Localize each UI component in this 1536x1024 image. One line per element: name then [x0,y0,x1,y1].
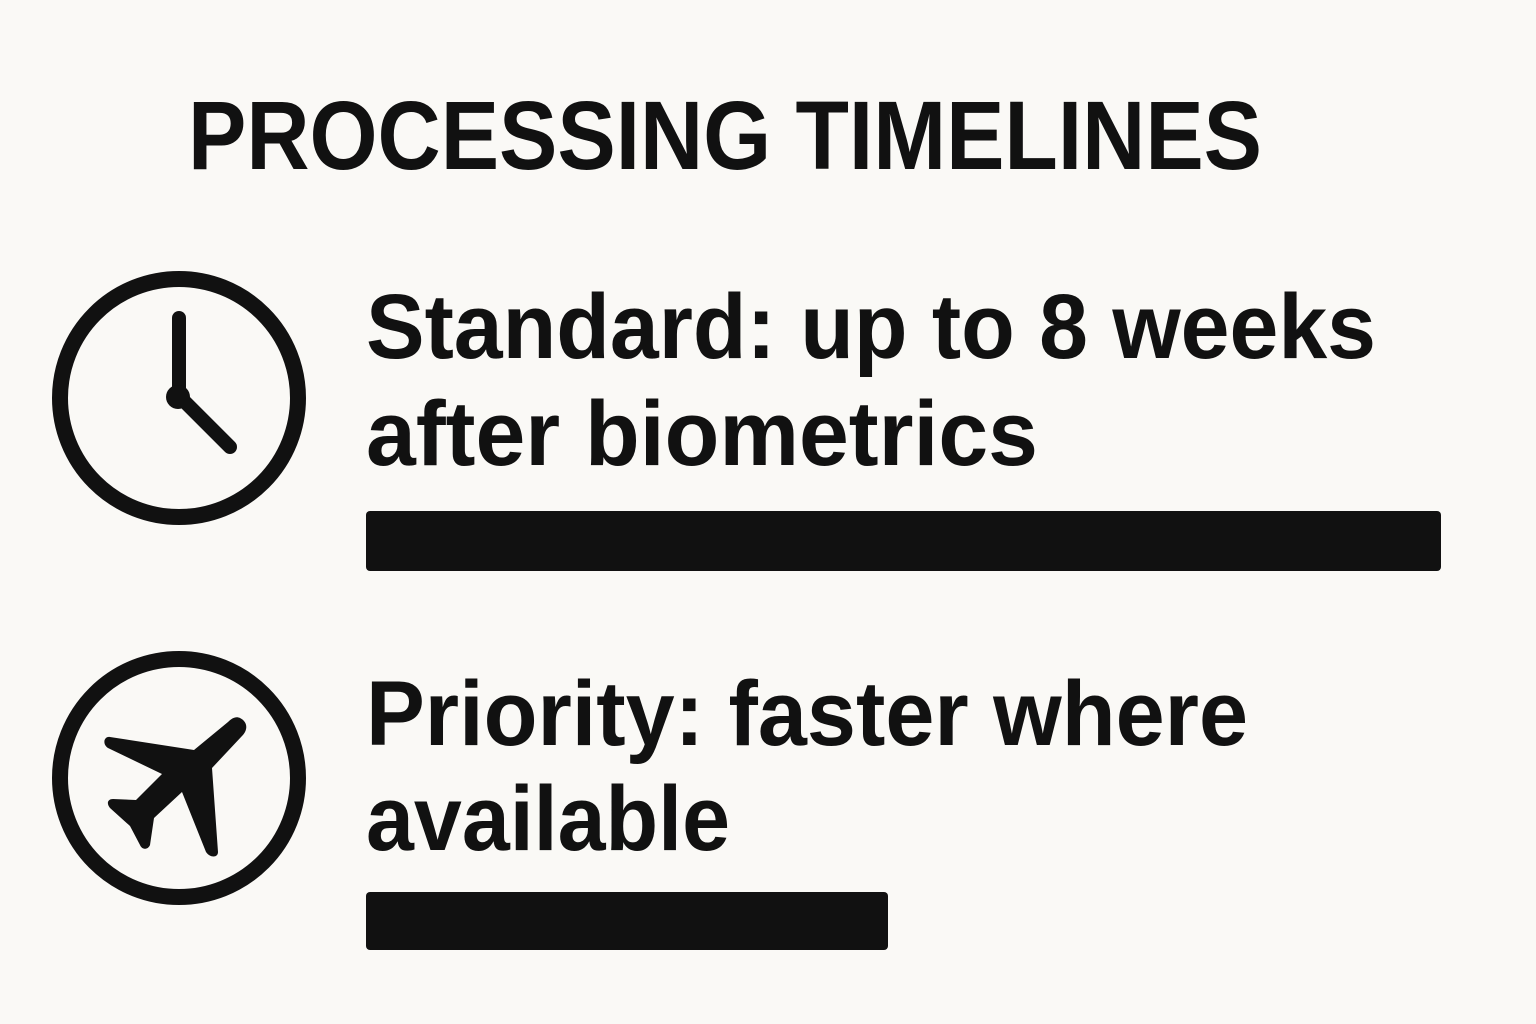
text: standard: Standard: up to 8 weeks [366,276,1376,378]
icon: clock [60,279,298,517]
bar: standard [366,511,1441,571]
text: standard [366,276,1376,485]
title: PROCESSING TIMELINES [188,81,1262,190]
bar: priority [366,892,888,950]
icon: airplane [60,659,298,897]
text: priority: Priority: faster where [366,663,1248,765]
text: priority: available [366,768,730,870]
text: standard: after biometrics [366,383,1038,485]
text: priority [366,663,1248,870]
